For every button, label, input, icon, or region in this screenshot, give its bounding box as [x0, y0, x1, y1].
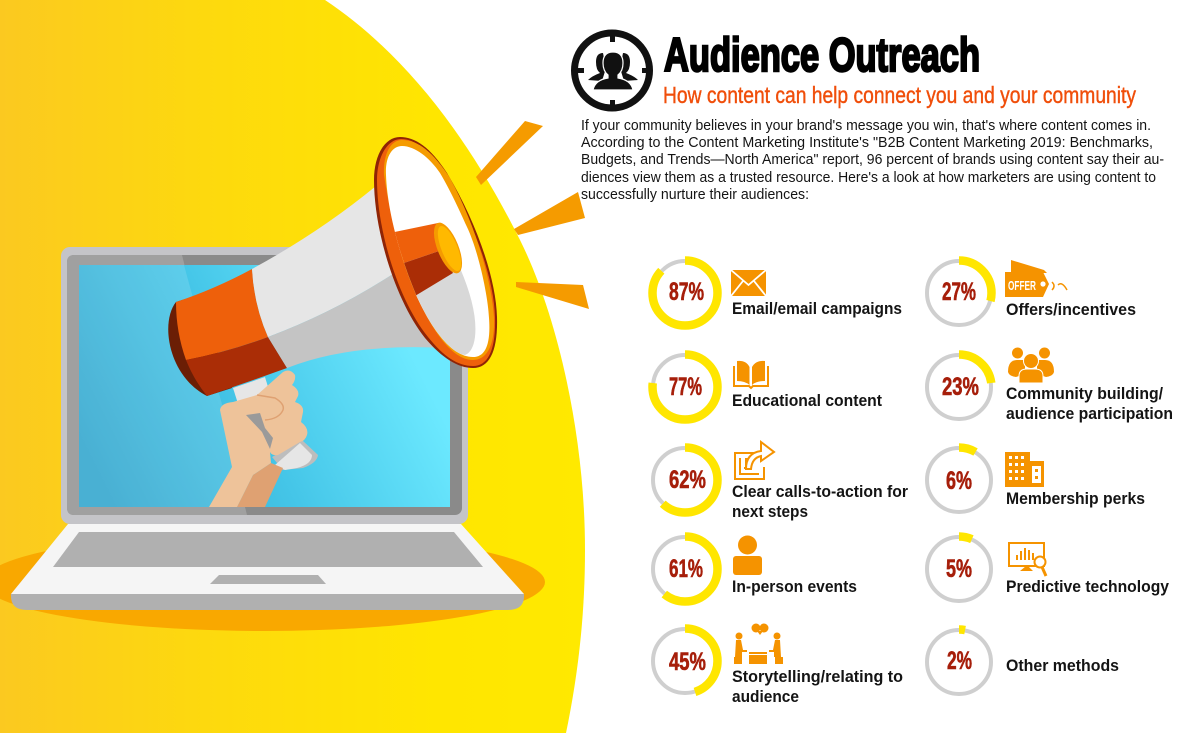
stat: 87% email: Email/email campaigns — [732, 300, 902, 318]
intro paragraph — [581, 117, 1164, 203]
stat: 61% in-person — [652, 536, 857, 602]
stat: 77% educational: 77% — [669, 373, 702, 401]
stat: 23% community: Community building/ — [1006, 385, 1163, 403]
header — [574, 28, 1164, 203]
intro paragraph: According to the Content Marketing Institute's "B2B Content Marketing 2019: Benchmarks, — [581, 134, 1153, 151]
background: yellow curved shape — [0, 0, 585, 733]
megaphone — [168, 137, 497, 396]
stat: 6% membership: Membership perks — [1006, 490, 1145, 508]
intro paragraph: If your community believes in your brand's message you win, that's where content comes in. — [581, 117, 1151, 134]
stat: 27% offers: 27% — [942, 278, 976, 306]
stat: 62% calls to action — [652, 442, 909, 521]
stat: 45% storytelling: audience — [732, 688, 799, 706]
hand holding megaphone — [209, 371, 318, 507]
stat: 61% in-person: 61% — [669, 555, 703, 583]
icon: audience target — [574, 33, 651, 109]
laptop lid — [61, 247, 468, 524]
touchpad — [210, 575, 326, 584]
stat: 6% membership: 6% — [946, 467, 972, 495]
stat: 2% other: Other methods — [1006, 657, 1119, 675]
stat: 87% email: 87% — [669, 278, 704, 306]
illustration: laptop with megaphone — [0, 137, 545, 631]
stat: 77% educational — [652, 354, 882, 420]
intro paragraph: diences view them as a trusted resource. Here's a look at how marketers are using content to — [581, 169, 1156, 186]
stat: 2% other: 2% — [947, 647, 972, 675]
stat: 5% predictive — [926, 536, 1170, 602]
stat: 27% offers: Offers/incentives — [1006, 301, 1136, 319]
laptop screen — [79, 265, 450, 507]
stat: 23% community: audience participation — [1006, 405, 1173, 423]
stat: 77% educational: Educational content — [732, 392, 882, 410]
stat: 23% community: 23% — [942, 373, 979, 401]
keyboard — [53, 532, 483, 567]
stat: 2% other — [926, 630, 1119, 694]
stat: 87% email — [652, 260, 902, 326]
stat: 62% calls to action: 62% — [669, 466, 706, 494]
stat: 6% membership — [926, 448, 1145, 512]
laptop — [11, 247, 524, 610]
stat: 23% community — [926, 348, 1173, 423]
stat: 45% storytelling: 45% — [669, 648, 706, 676]
laptop base — [11, 524, 524, 594]
intro paragraph: successfully nurture their audiences: — [581, 186, 809, 203]
title: Audience Outreach — [664, 28, 980, 81]
stat: 27% offers: OFFER — [1008, 278, 1036, 293]
stat: 61% in-person: In-person events — [732, 578, 857, 596]
panel: statistics — [652, 260, 1173, 706]
laptop shadow ellipse — [0, 533, 545, 631]
stat: 27% offers — [926, 260, 1136, 326]
stat: 62% calls to action: Clear calls-to-action for — [732, 483, 909, 501]
sound rays — [476, 121, 589, 309]
stat: 5% predictive: Predictive technology — [1006, 578, 1170, 596]
stat: 45% storytelling: Storytelling/relating to — [732, 668, 903, 686]
stat: 5% predictive: 5% — [946, 555, 972, 583]
intro paragraph: Budgets, and Trends—North America" report, 96 percent of brands using content say their au- — [581, 151, 1164, 168]
stat: 62% calls to action: next steps — [732, 503, 808, 521]
stat: 45% storytelling — [652, 624, 903, 706]
